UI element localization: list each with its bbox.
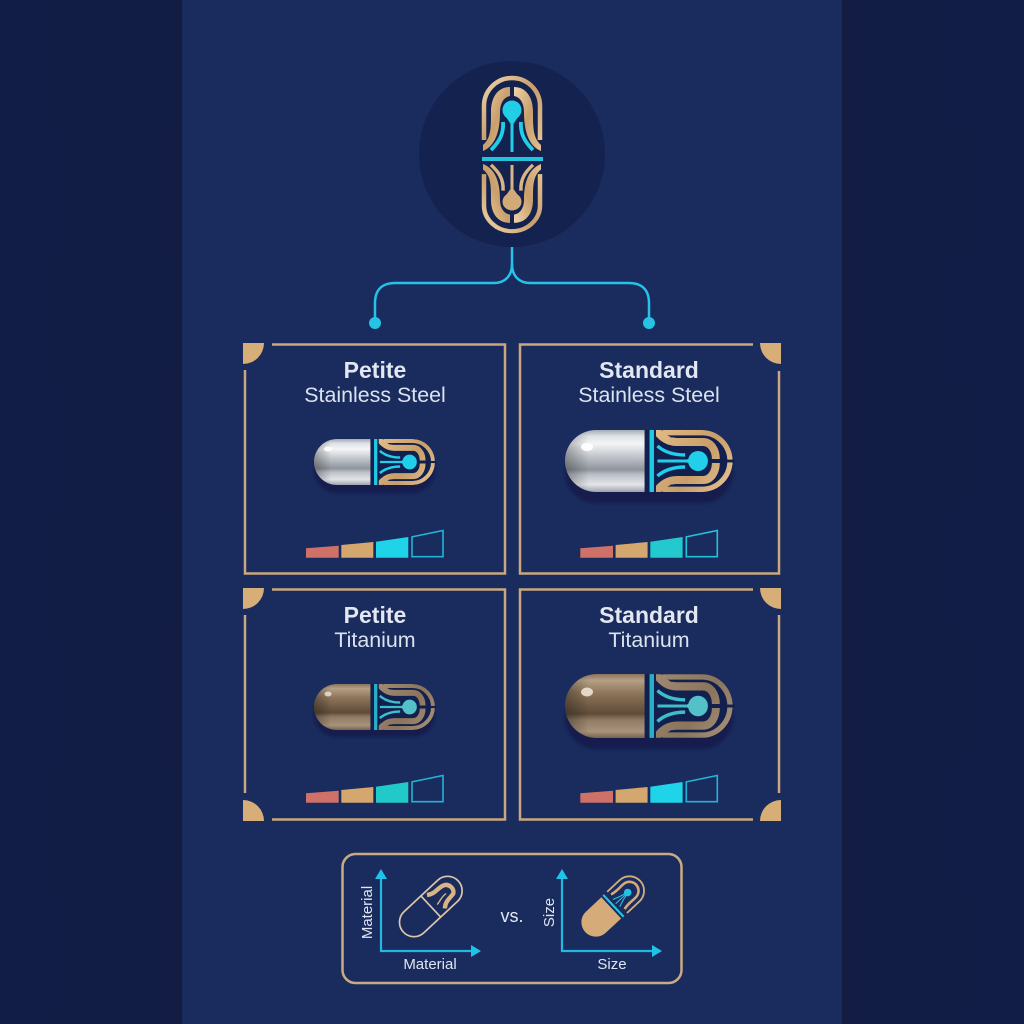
right chart y label: Size — [541, 898, 558, 927]
panel: standard stainless steel: Stainless Steel — [578, 383, 720, 407]
left chart y label: Material — [359, 886, 376, 939]
panel: petite stainless steel: Petite — [344, 357, 406, 383]
icon: outlined capsule — [393, 870, 468, 943]
panel: standard stainless steel: Standard — [599, 357, 699, 383]
panel: standard stainless steel — [520, 343, 781, 574]
vs label: vs. — [500, 906, 524, 926]
panel: petite stainless steel: Stainless Steel — [304, 383, 446, 407]
capsule: petite steel — [314, 436, 436, 493]
capsule: petite titanium — [314, 681, 436, 737]
panel: standard titanium: Standard — [599, 602, 699, 628]
icon: filled capsule — [575, 870, 650, 943]
panel: petite titanium: Titanium — [334, 628, 416, 652]
legend panel — [342, 854, 682, 983]
right chart x label: Size — [597, 956, 627, 973]
strength bars — [580, 530, 717, 558]
panel: petite titanium: Petite — [344, 602, 406, 628]
capsule: standard steel — [565, 426, 735, 503]
emblem: capsule logo in circle — [419, 61, 605, 247]
connector lines from emblem to top cards — [369, 247, 655, 329]
left chart x label: Material — [403, 956, 457, 973]
panel: standard titanium — [520, 588, 781, 821]
panel: standard titanium: Titanium — [608, 628, 690, 652]
panel: petite stainless steel — [243, 343, 505, 574]
strength bars — [306, 776, 443, 803]
left chart axes — [375, 869, 481, 957]
right chart axes — [556, 869, 662, 957]
panel: petite titanium — [243, 588, 505, 821]
strength bars — [580, 776, 717, 803]
strength bars — [306, 530, 443, 558]
capsule: standard titanium — [565, 670, 735, 749]
